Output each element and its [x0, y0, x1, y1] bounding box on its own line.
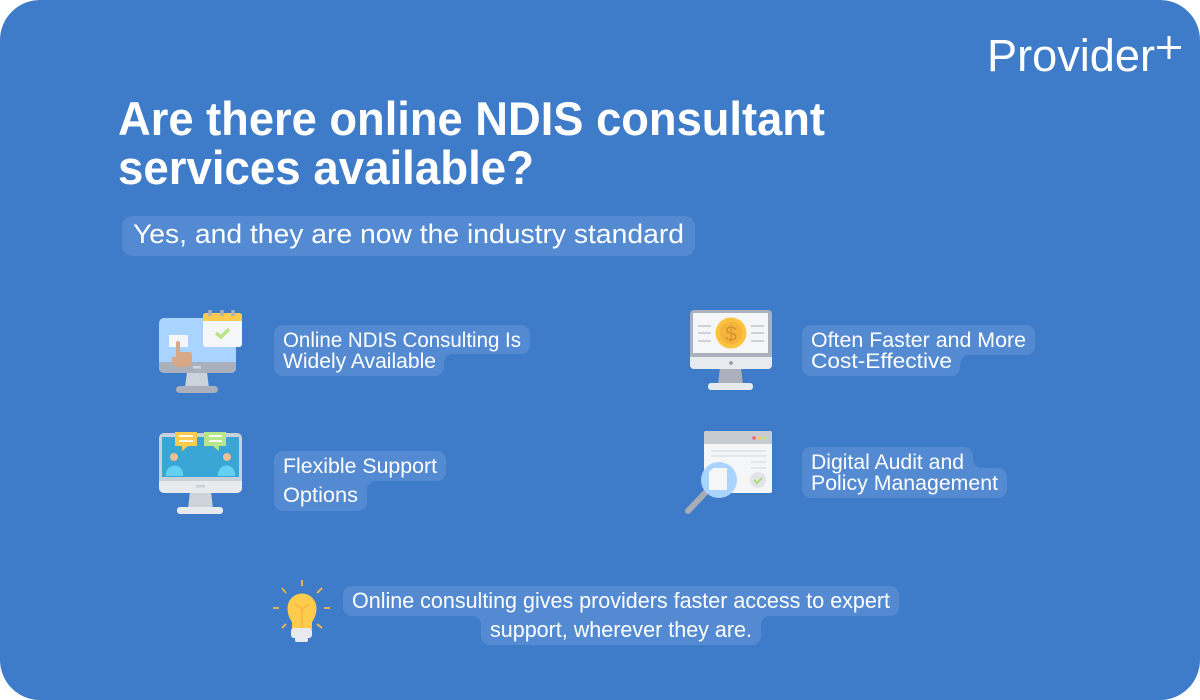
label text: Options	[283, 483, 358, 507]
label text: Flexible Support	[283, 454, 437, 478]
icon: monitor with calendar	[159, 310, 242, 393]
label highlight	[274, 325, 530, 376]
label text: Widely Available	[283, 349, 436, 373]
item: flexible support	[159, 432, 446, 514]
label text	[283, 328, 521, 373]
callout text	[352, 588, 891, 642]
callout text: support, wherever they are.	[490, 617, 752, 642]
subtitle highlight: Yes, and they are now the industry standard	[133, 219, 684, 249]
logo: Provider+: Provider	[987, 30, 1155, 81]
label highlight	[802, 325, 1035, 376]
callout text: Online consulting gives providers faster access to expert	[352, 588, 891, 613]
callout	[273, 580, 899, 645]
subtitle highlight	[122, 216, 695, 256]
label text: Digital Audit and	[811, 450, 964, 474]
label text	[811, 450, 998, 495]
label highlight	[274, 451, 446, 511]
icon: document under magnifier	[688, 431, 772, 511]
label text: Often Faster and More	[811, 328, 1026, 352]
label text	[811, 328, 1026, 373]
item: digital audit	[688, 431, 1007, 511]
icon: monitor with dollar coin: $	[725, 323, 737, 346]
label text	[283, 454, 437, 507]
label text: Online NDIS Consulting Is	[283, 328, 521, 352]
icon: light bulb	[273, 580, 330, 642]
title: Are there online NDIS consultant	[118, 92, 825, 145]
item: faster and cost-effective	[690, 310, 1035, 390]
title	[118, 92, 825, 194]
icon: video call monitor	[159, 432, 242, 514]
title: services available?	[118, 141, 534, 194]
label highlight	[802, 447, 1007, 498]
callout highlight	[343, 586, 899, 645]
icon: monitor with dollar coin	[690, 310, 772, 390]
label text: Policy Management	[811, 471, 998, 495]
label text: Cost-Effective	[811, 349, 952, 373]
item: online consulting	[159, 310, 530, 393]
